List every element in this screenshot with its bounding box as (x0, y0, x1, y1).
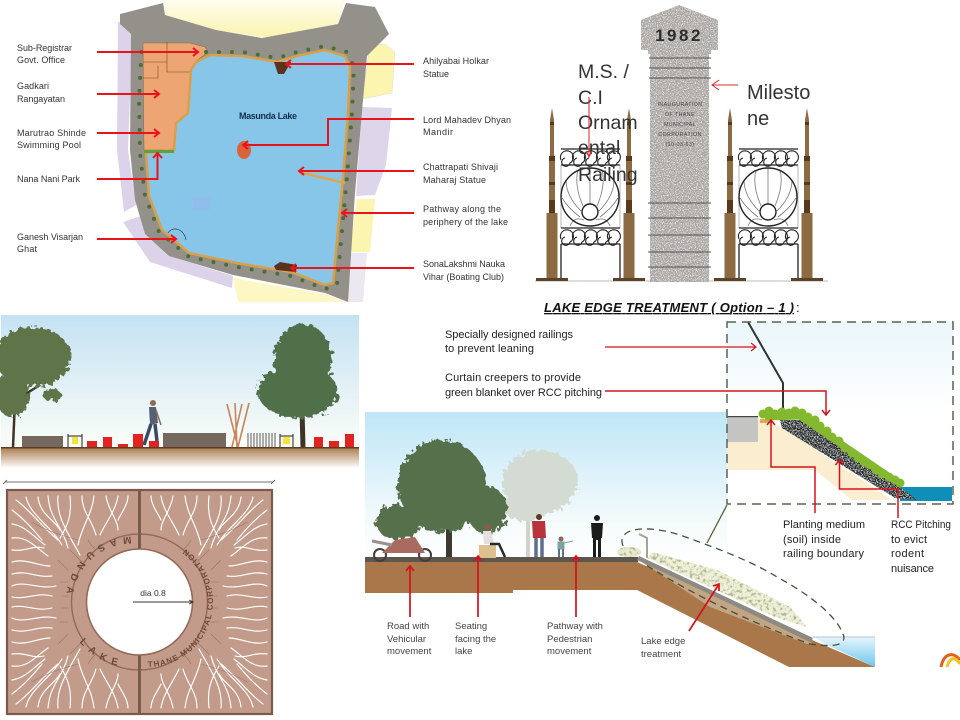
railing label: C.I (578, 87, 603, 109)
inscription: (10-03-63) (666, 142, 694, 148)
planting medium label (783, 519, 865, 560)
red arrows (406, 343, 898, 631)
water (813, 637, 875, 667)
seat (479, 545, 496, 558)
pale square on lake (193, 197, 210, 210)
red planters (87, 434, 354, 447)
right tree (258, 324, 338, 447)
map arrows (97, 48, 414, 272)
faded tree (501, 450, 578, 558)
Shivaji statue pier (299, 172, 345, 183)
heading colon: : (796, 300, 800, 315)
railing label (578, 61, 638, 186)
fence (248, 433, 275, 447)
centre divider (138, 490, 141, 714)
rcc pitching label: to evict (891, 534, 927, 546)
grate plate (7, 490, 272, 714)
planting medium label: railing boundary (783, 548, 864, 560)
inscription ring (72, 534, 208, 670)
topsoil (760, 419, 772, 423)
left tree (0, 327, 71, 447)
map labels right: Vihar (Boating Club) (423, 272, 504, 282)
ground line (535, 280, 828, 282)
curtain creepers (758, 406, 904, 488)
sky (1, 315, 359, 447)
Nana Nani Park (144, 150, 174, 153)
ring lettering: THANE MUNICIPAL CORPORATION (148, 549, 214, 667)
Ahilyabai Holkar statue (274, 62, 291, 74)
map labels right: periphery of the lake (423, 217, 508, 227)
pathway label: movement (547, 646, 592, 657)
map labels left: Nana Nani Park (17, 174, 80, 184)
building outlines (143, 42, 190, 78)
map labels right: SonaLakshmi Nauka (423, 259, 505, 269)
lake edge label: treatment (641, 649, 681, 660)
lake (146, 50, 350, 285)
rcc pitching label (891, 519, 951, 575)
map labels right: Chattrapati Shivaji (423, 162, 498, 172)
diameter label: dia 0.8 (140, 588, 166, 598)
creepers at the slope crest (617, 547, 641, 557)
central opening (86, 549, 192, 655)
map labels right: Ahilyabai Holkar (423, 56, 489, 66)
decorative posts (536, 108, 823, 281)
inscription: CORPORATION (658, 132, 702, 138)
seating label: facing the (455, 634, 496, 645)
child (558, 536, 573, 557)
silhouette (591, 515, 603, 557)
right railing (738, 149, 798, 279)
road label: movement (387, 646, 432, 657)
pavement (365, 557, 638, 562)
pathway label (547, 621, 603, 657)
rcc pitching label: rodent (891, 548, 924, 560)
planted slope layer (640, 560, 812, 644)
map labels left: Ghat (17, 244, 37, 254)
planting medium label: Planting medium (783, 519, 865, 531)
stone milestone column (641, 5, 718, 282)
diameter arrow (133, 600, 193, 604)
water surface line (813, 636, 875, 638)
SonaLakshmi boating club (274, 262, 297, 272)
paving top edge (727, 416, 758, 417)
Ganesh Visarjan Ghat (168, 229, 186, 240)
milestone arrow (712, 80, 738, 90)
paving hatch (727, 417, 758, 442)
pathway label: Pedestrian (547, 634, 592, 645)
panel: promenade section (0, 315, 359, 468)
lakeside trees (139, 40, 354, 289)
road label: Road with (387, 621, 429, 632)
milestone label (747, 82, 810, 130)
connector (707, 505, 727, 543)
railing label: M.S. / (578, 61, 630, 83)
panel: lake edge treatment (365, 300, 953, 667)
railing label: Ornam (578, 112, 638, 134)
milestone label: Milesto (747, 82, 810, 104)
rcc pitching (780, 420, 917, 500)
map labels left: Sub-Registrar (17, 43, 72, 53)
upper labels (445, 329, 602, 399)
sky (365, 412, 727, 562)
slope railing (639, 534, 647, 558)
inscription (657, 102, 703, 148)
ring lettering: LAKE (80, 638, 118, 666)
map labels left: Gadkari (17, 81, 49, 91)
map labels right: Mandir (423, 127, 453, 137)
root pattern (12, 496, 267, 708)
railing label: Railing (578, 164, 638, 186)
ring lettering: MASUNDA (66, 536, 132, 593)
map labels right: Pathway along the (423, 204, 501, 214)
dimension line (3, 480, 275, 484)
dashed ellipse (622, 529, 844, 646)
detail inset (727, 322, 953, 504)
woman (532, 514, 546, 557)
upper labels: green blanket over RCC pitching (445, 387, 602, 399)
pedestrian (144, 400, 161, 445)
map labels right: Lord Mahadev Dhyan (423, 115, 511, 125)
panel: Masunda Lake site plan (17, 0, 511, 302)
ground (1, 447, 359, 468)
Lord Mahadev Dhyan Mandir island (237, 141, 251, 159)
rcc pitching label: RCC Pitching (891, 519, 951, 531)
ring lettering (66, 536, 214, 667)
map labels left: Rangayatan (17, 94, 65, 104)
rcc pitching label: nuisance (891, 563, 934, 575)
road label (387, 621, 432, 657)
left railing (560, 149, 620, 279)
map labels right (423, 56, 511, 282)
inscription: OF THANE (665, 112, 695, 118)
railing (748, 322, 783, 411)
seating label (455, 621, 496, 657)
map labels right: Statue (423, 69, 449, 79)
lake edge label (641, 636, 685, 660)
inscription: INAUGURATION (657, 102, 703, 108)
creepers (647, 552, 807, 627)
railing arrow (586, 97, 592, 157)
yellow lights (68, 434, 293, 447)
motorcycle (372, 537, 431, 561)
ground section (365, 562, 875, 667)
heading: LAKE EDGE TREATMENT ( Option – 1 ) (544, 300, 794, 315)
milestone label: ne (747, 108, 769, 130)
water (900, 487, 952, 501)
main tree (376, 440, 507, 561)
upper labels: Curtain creepers to provide (445, 372, 581, 384)
surrounding plots (117, 0, 395, 302)
buildings (143, 43, 208, 150)
lake title: Masunda Lake (239, 111, 297, 121)
inscription: MUNICIPAL (664, 122, 696, 128)
year: 1982 (655, 26, 703, 45)
map labels left (17, 43, 86, 254)
railing label: ental (578, 137, 620, 159)
map labels right: Maharaj Statue (423, 175, 486, 185)
roads (120, 3, 389, 302)
lake edge label: Lake edge (641, 636, 685, 647)
road label: Vehicular (387, 634, 426, 645)
benches (22, 433, 226, 447)
soil (727, 420, 892, 500)
dashed frame (727, 322, 953, 504)
map labels left: Marutrao Shinde (17, 128, 86, 138)
upper labels: Specially designed railings (445, 329, 574, 341)
upper labels: to prevent leaning (445, 343, 534, 355)
seated person (483, 524, 505, 557)
icon: corner logo (941, 655, 960, 667)
seating label: lake (455, 646, 472, 657)
bamboo sticks (227, 403, 249, 447)
map labels left: Govt. Office (17, 55, 65, 65)
pathway label: Pathway with (547, 621, 603, 632)
planting medium label: (soil) inside (783, 534, 841, 546)
map labels left: Swimming Pool (17, 140, 81, 150)
panel: milestone and railing elevation (535, 5, 828, 282)
panel: tree grate (2, 480, 276, 716)
grey slope strip (638, 558, 812, 640)
map labels left: Ganesh Visarjan (17, 232, 83, 242)
seating label: Seating (455, 621, 487, 632)
